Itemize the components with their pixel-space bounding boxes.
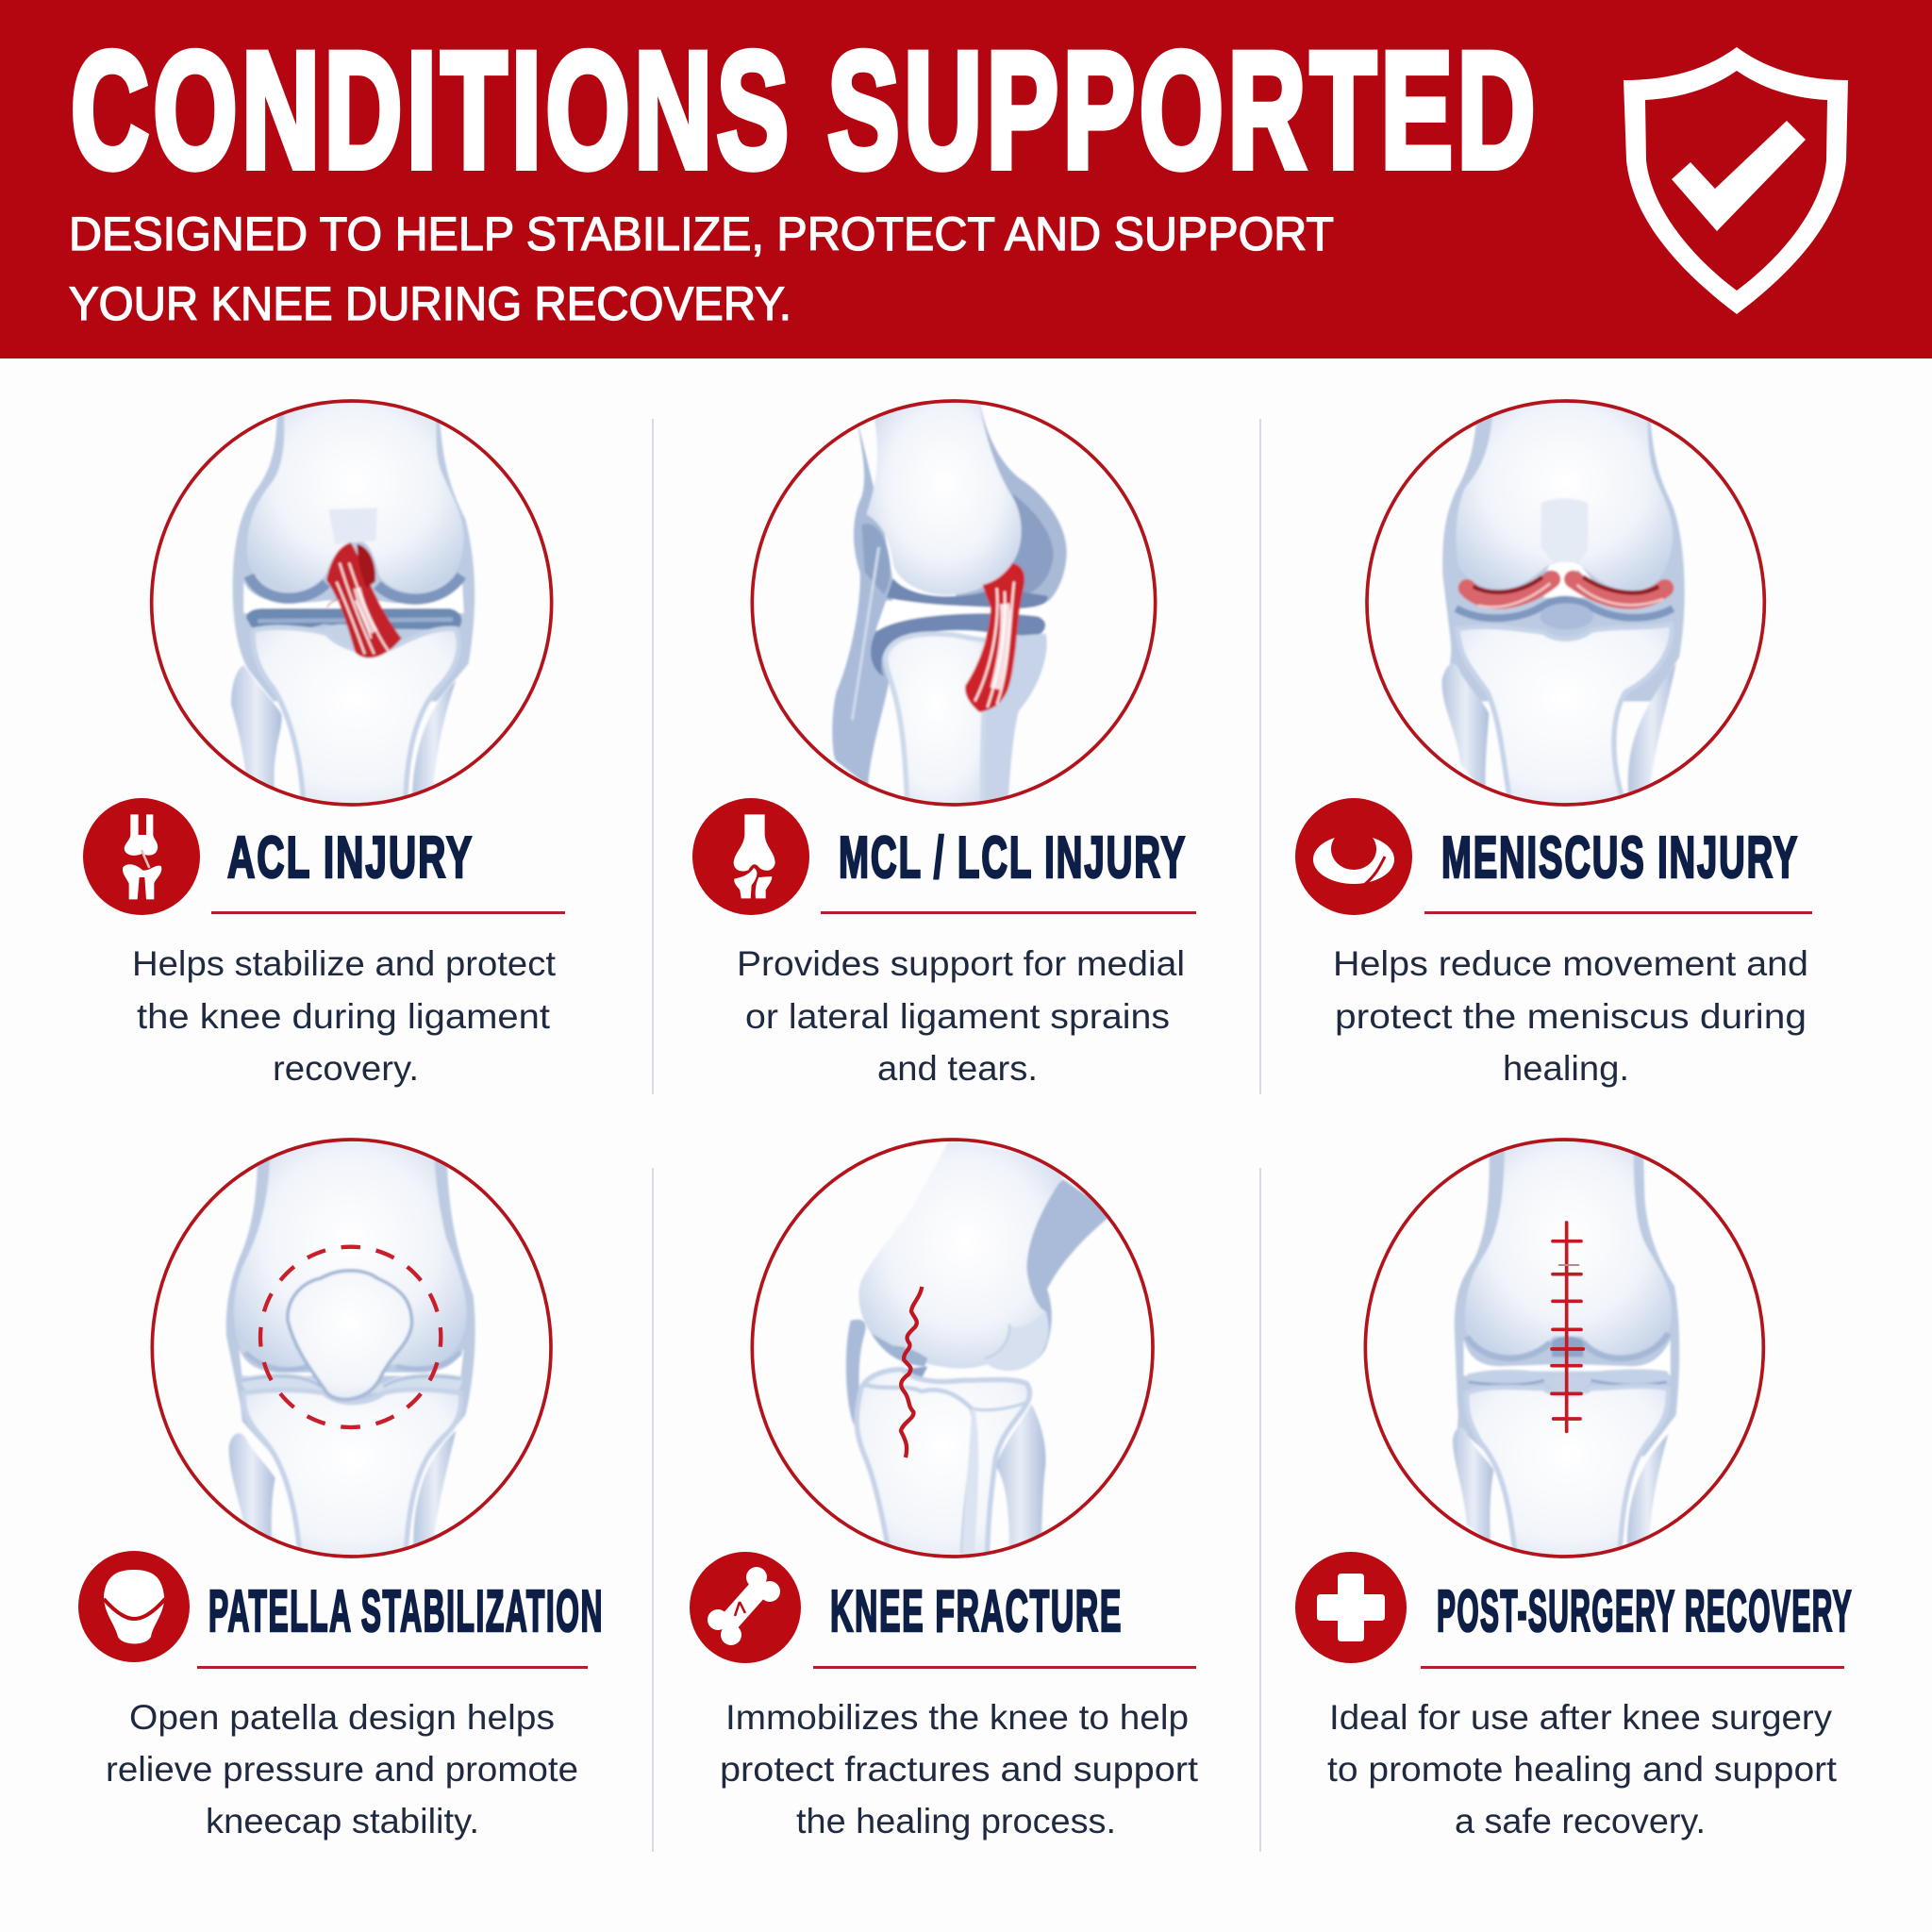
panel: ACL injury <box>83 393 565 1088</box>
description: Ideal for use after knee surgery <box>1329 1698 1833 1737</box>
icon: knee bones <box>692 798 809 915</box>
illustration: MCL knee <box>752 393 1156 808</box>
panel: meniscus injury <box>1295 393 1812 1088</box>
underline <box>813 1666 1196 1669</box>
icon: knee joint <box>83 798 200 915</box>
underline <box>1421 1666 1844 1669</box>
description: Helps reduce movement and <box>1333 944 1808 983</box>
underline <box>821 911 1196 914</box>
description: kneecap stability. <box>206 1802 479 1840</box>
description: and tears. <box>877 1049 1038 1088</box>
underline <box>1424 911 1812 914</box>
description: Helps stabilize and protect <box>132 944 557 983</box>
icon: shield with check <box>1624 47 1848 314</box>
description: a safe recovery. <box>1455 1802 1706 1840</box>
underline <box>197 1666 588 1669</box>
description <box>1327 1698 1838 1840</box>
description: Open patella design helps <box>129 1698 555 1737</box>
panel: patella stabilization <box>78 1135 604 1840</box>
subtitle: DESIGNED TO HELP STABILIZE, PROTECT AND SUPPORT <box>69 208 1334 260</box>
description: Provides support for medial <box>737 944 1185 983</box>
illustration: ACL knee <box>152 393 552 808</box>
description: recovery. <box>273 1049 419 1088</box>
description <box>737 944 1185 1088</box>
underline <box>211 911 565 914</box>
description: protect the meniscus during <box>1335 997 1807 1036</box>
description: relieve pressure and promote <box>106 1750 578 1789</box>
header banner <box>0 0 1932 358</box>
description: protect fractures and support <box>720 1750 1199 1789</box>
icon: meniscus <box>1295 798 1412 915</box>
description <box>132 944 557 1088</box>
description: to promote healing and support <box>1327 1750 1838 1789</box>
heading: PATELLA STABILIZATION <box>208 1579 604 1644</box>
description <box>106 1698 578 1840</box>
panel: post-surgery recovery <box>1295 1135 1853 1840</box>
subtitle: YOUR KNEE DURING RECOVERY. <box>69 277 791 330</box>
description: the healing process. <box>796 1802 1116 1840</box>
icon: kneecap <box>78 1551 190 1662</box>
heading: MCL / LCL INJURY <box>839 825 1187 891</box>
illustration: meniscus knee <box>1367 393 1764 808</box>
illustration: sutured knee <box>1365 1135 1763 1559</box>
description: or lateral ligament sprains <box>745 997 1170 1036</box>
heading: ACL INJURY <box>227 825 474 891</box>
subtitle <box>69 208 1334 330</box>
icon: broken bone <box>690 1552 801 1663</box>
icon: medical cross <box>1295 1552 1407 1663</box>
dividers <box>652 419 1261 1852</box>
description <box>1333 944 1808 1088</box>
illustration: patella knee <box>152 1135 551 1559</box>
description <box>720 1698 1199 1840</box>
panel: MCL / LCL injury <box>692 393 1196 1088</box>
illustration: fractured knee <box>752 1139 1153 1559</box>
description: Immobilizes the knee to help <box>725 1698 1189 1737</box>
heading: KNEE FRACTURE <box>830 1579 1123 1644</box>
description: the knee during ligament <box>137 997 551 1036</box>
panel: knee fracture <box>690 1139 1199 1840</box>
description: healing. <box>1503 1049 1629 1088</box>
